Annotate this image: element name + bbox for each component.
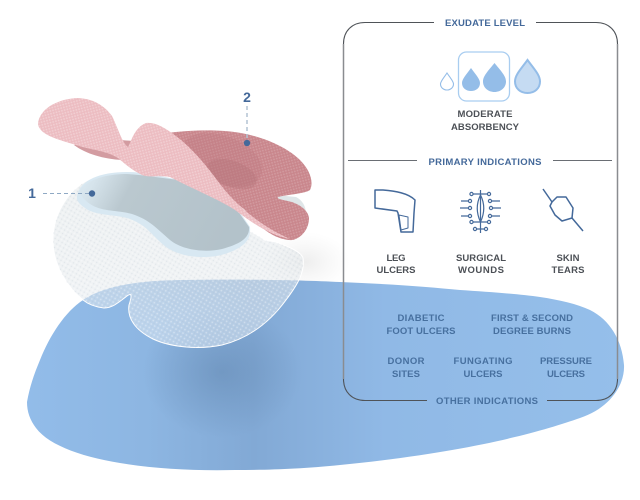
heading: exudate level: EXUDATE LEVEL: [445, 18, 525, 29]
icon: leg ulcers: [375, 190, 415, 232]
icon: surgical wounds: [460, 190, 501, 233]
label: diabetic foot ulcers: DIABETIC: [398, 313, 445, 324]
label: fungating ulcers: FUNGATING: [454, 356, 512, 367]
label: leg ulcers: [376, 253, 416, 276]
pink layer: back: [150, 123, 312, 240]
label: pressure ulcers: PRESSURE: [540, 356, 592, 367]
label: first and second degree burns: FIRST & SECOND: [491, 313, 573, 324]
moderate absorbency label: MODERATE: [458, 109, 512, 120]
label: fungating ulcers: ULCERS: [464, 369, 502, 380]
heading: other indications: OTHER INDICATIONS: [436, 396, 538, 407]
label: pressure ulcers: [540, 356, 592, 380]
moderate absorbency label: ABSORBENCY: [451, 122, 520, 133]
pink layer: left underside: [74, 140, 134, 160]
callout 1: 1: [28, 185, 36, 201]
info panel frame: [344, 22, 618, 400]
label: diabetic foot ulcers: [386, 313, 456, 337]
label: donor sites: SITES: [392, 369, 420, 380]
label: pressure ulcers: ULCERS: [547, 369, 585, 380]
label: surgical wounds: SURGICAL: [456, 253, 506, 264]
label: donor sites: [388, 356, 425, 380]
label: first and second degree burns: DEGREE BURNS: [493, 326, 571, 337]
exudate level drops: [440, 52, 540, 101]
label: leg ulcers: ULCERS: [376, 265, 416, 276]
callout 2: 2: [243, 89, 251, 105]
blue background blob: [27, 280, 624, 470]
icon: skin tears: [543, 189, 583, 231]
label: fungating ulcers: [454, 356, 512, 380]
label: first and second degree burns: [491, 313, 573, 337]
label: diabetic foot ulcers: FOOT ULCERS: [386, 326, 456, 337]
label: skin tears: TEARS: [552, 265, 584, 276]
faint shadow on background: [260, 232, 350, 292]
label: skin tears: [552, 253, 584, 276]
label: leg ulcers: LEG: [386, 253, 406, 264]
label: surgical wounds: [456, 253, 506, 276]
pink layer: front flap: [38, 98, 290, 239]
dressing: absorbent pad: [77, 172, 250, 257]
label: skin tears: SKIN: [556, 253, 580, 264]
callout 2: [243, 89, 251, 146]
label: donor sites: DONOR: [388, 356, 425, 367]
primary indications heading with rules: PRIMARY INDICATIONS: [428, 157, 542, 168]
moderate absorbency label: [451, 109, 520, 133]
callout 1: [28, 185, 95, 201]
dressing: bottom translucent layer: [53, 180, 306, 347]
label: surgical wounds: WOUNDS: [458, 265, 504, 276]
